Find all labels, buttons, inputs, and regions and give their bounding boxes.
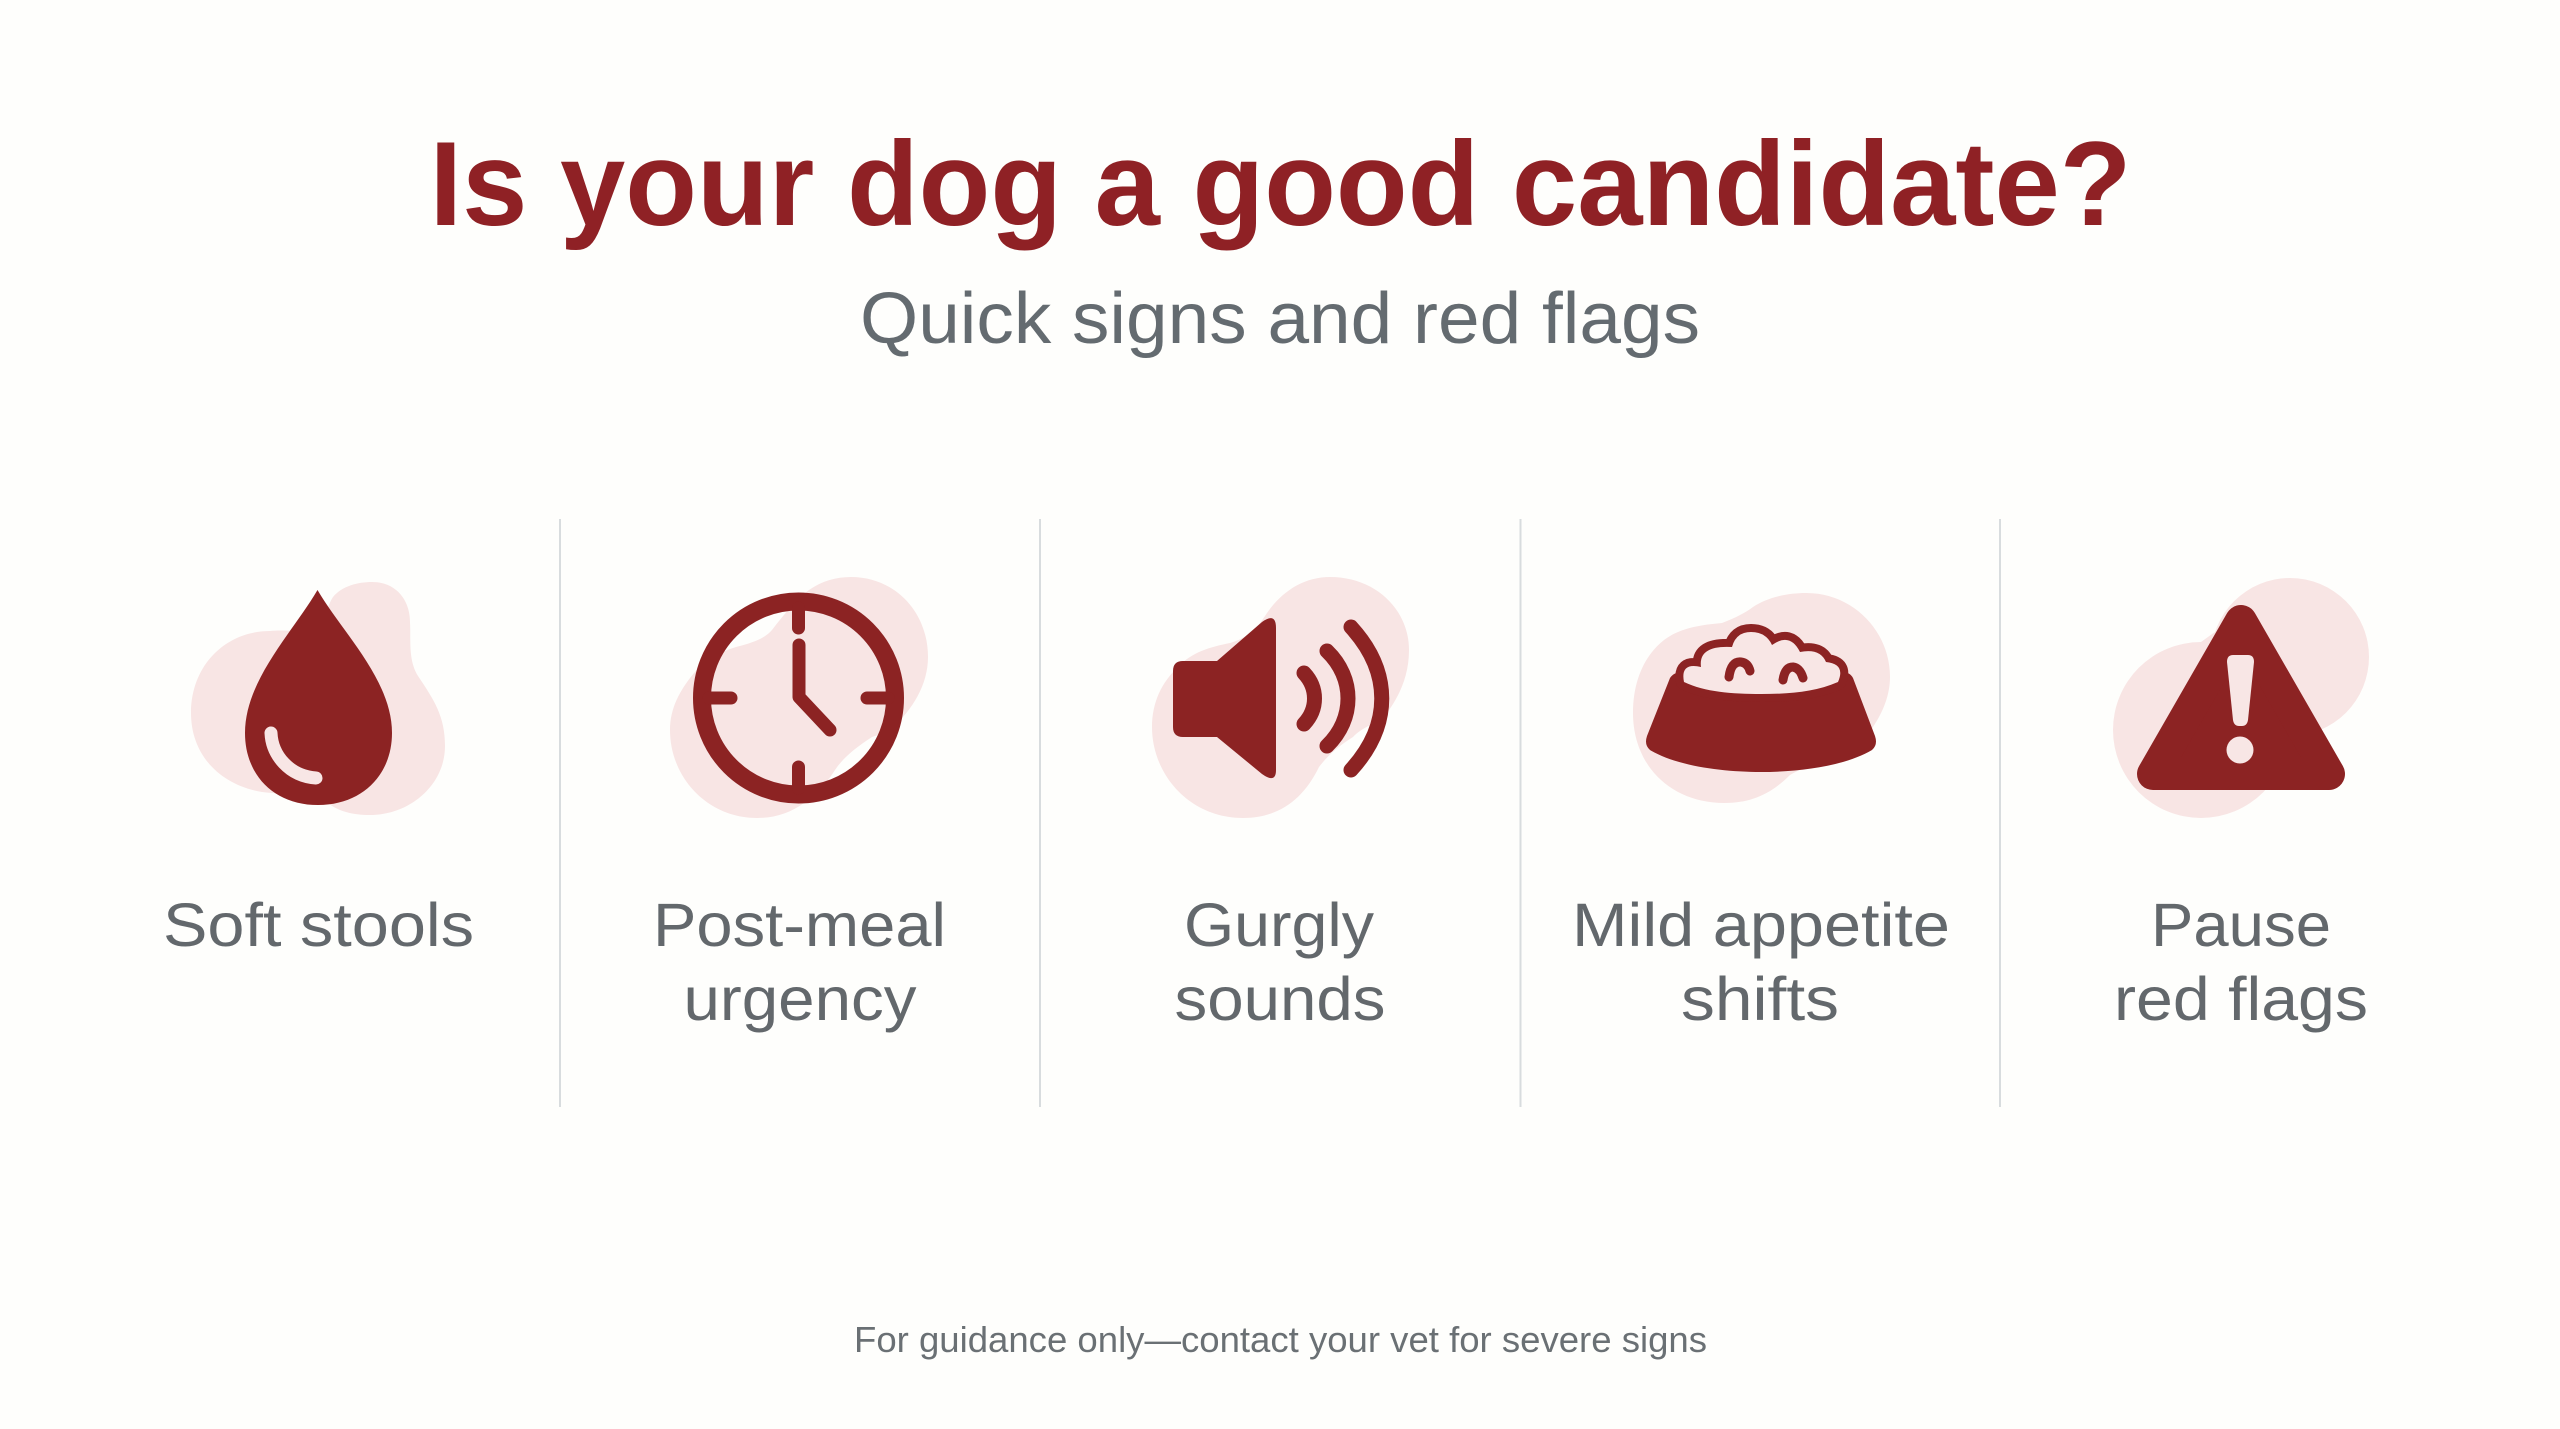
label: soft stools: Soft stools: [163, 891, 474, 959]
panel: post-meal urgency: [653, 577, 946, 1033]
label: mild appetite shifts: Mild appetite: [1572, 891, 1950, 959]
icon: clock: [670, 577, 928, 818]
icon: speaker: [1152, 577, 1409, 818]
label: pause red flags: Pause: [2151, 891, 2331, 959]
panel: soft stools: [163, 582, 474, 959]
label: pause red flags: [2114, 891, 2368, 1033]
label: gurgly sounds: Gurgly: [1184, 891, 1375, 959]
label: gurgly sounds: [1174, 891, 1386, 1033]
label: mild appetite shifts: shifts: [1681, 965, 1839, 1033]
label: pause red flags: red flags: [2114, 965, 2368, 1033]
label: post-meal urgency: urgency: [684, 965, 917, 1033]
icon: blood drop: [191, 582, 445, 815]
title: Is your dog a good candidate?: [430, 117, 2132, 251]
panel: mild appetite shifts: [1572, 593, 1950, 1033]
label: post-meal urgency: Post-meal: [653, 891, 946, 959]
icon: warning triangle: [2113, 578, 2369, 818]
label: gurgly sounds: sounds: [1174, 965, 1386, 1033]
label: post-meal urgency: [653, 891, 946, 1033]
icon: food bowl: [1633, 593, 1890, 803]
footer note: For guidance only—contact your vet for severe signs: [854, 1319, 1707, 1360]
panel: gurgly sounds: [1152, 577, 1409, 1033]
subtitle: Quick signs and red flags: [860, 279, 1700, 359]
panel: pause red flags: [2113, 578, 2369, 1033]
label: mild appetite shifts: [1572, 891, 1950, 1033]
